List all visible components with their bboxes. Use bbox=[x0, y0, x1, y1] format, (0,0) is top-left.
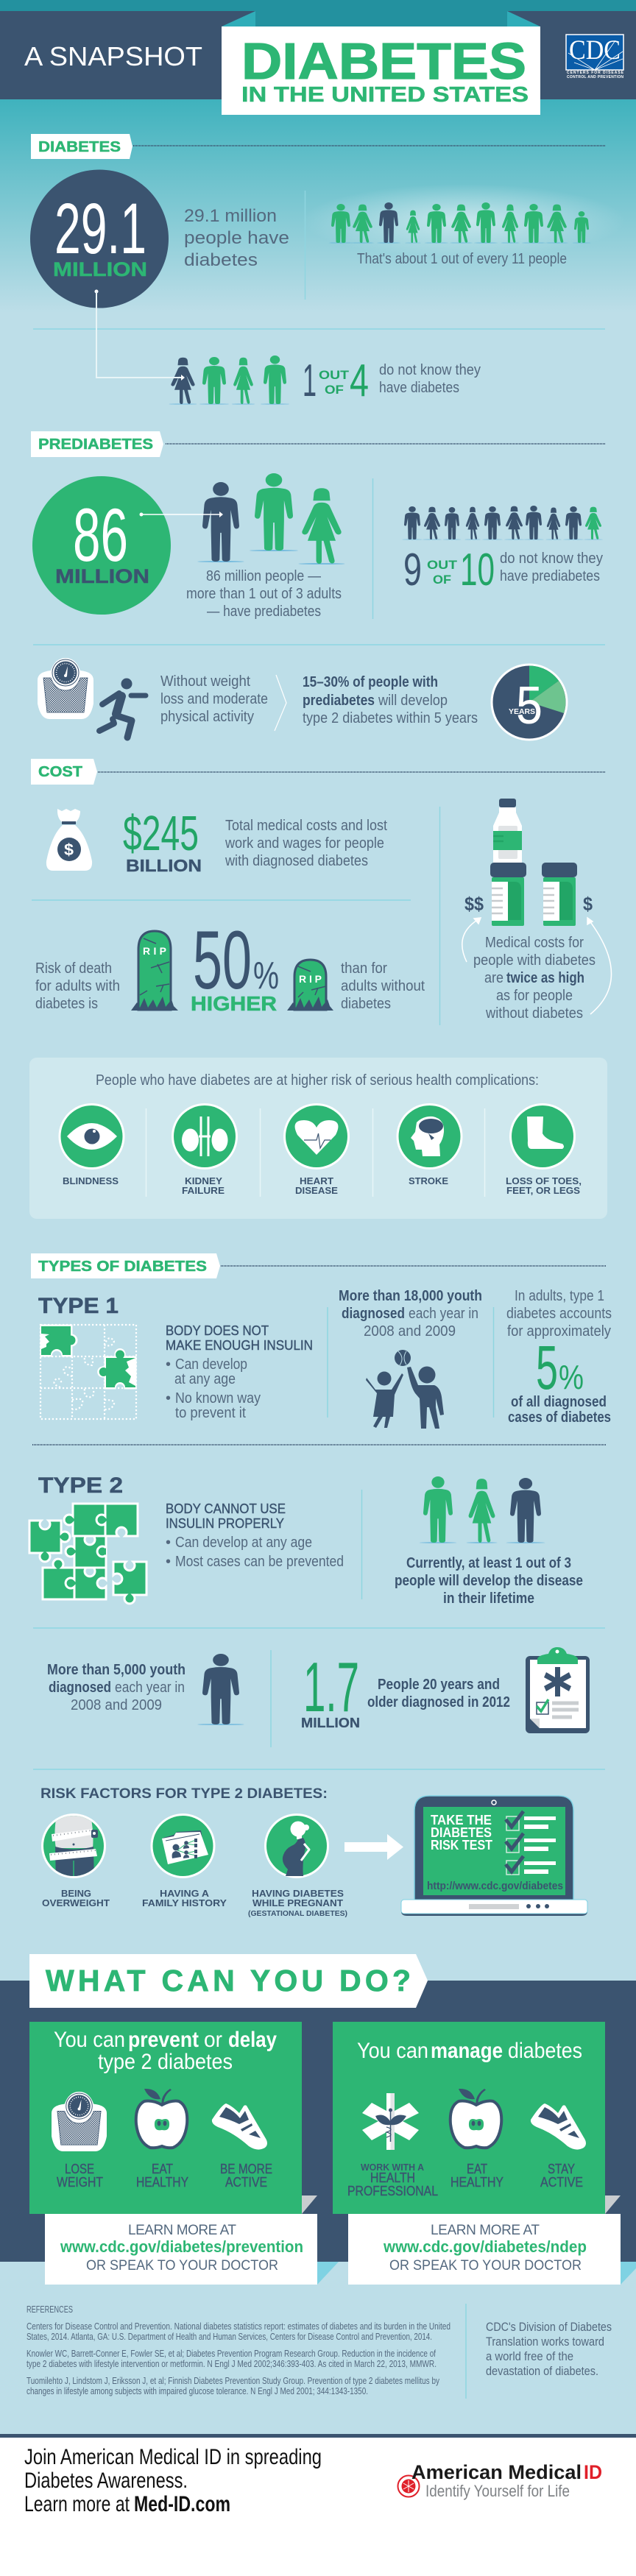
labels: prevent actions: EAT bbox=[152, 2162, 173, 2176]
text: risk of death bbox=[35, 960, 120, 1012]
text: than for adults without: than for bbox=[341, 960, 387, 977]
text: in adults 5 percent: cases of diabetes bbox=[508, 1409, 611, 1426]
text: CDC division statement: a world free of the bbox=[486, 2349, 573, 2363]
icon: type 2 puzzle bbox=[29, 1504, 146, 1604]
references: REFERENCES bbox=[26, 2304, 73, 2315]
panel heading: prevent or delay: prevent bbox=[128, 2028, 199, 2052]
section: risk factors bbox=[40, 1786, 587, 1918]
section: prediabetes bbox=[31, 431, 606, 740]
text: 29.1 million people have diabetes: diabetes bbox=[184, 250, 258, 270]
arrow: circle to person bbox=[140, 512, 223, 517]
stat circle: 86 million bbox=[32, 476, 171, 615]
text: 15-30 percent: prediabetes bbox=[303, 693, 375, 709]
stat: 9 out of 10: OUT bbox=[427, 558, 458, 572]
item: kidney failure bbox=[172, 1103, 238, 1196]
icon: star of life bbox=[362, 2093, 419, 2150]
labels: manage actions: HEALTHY bbox=[451, 2175, 504, 2190]
risk: overweight bbox=[41, 1811, 110, 1908]
stat: 9 out of 10: 9 bbox=[403, 545, 422, 595]
stat circle: 86 million: MILLION bbox=[55, 565, 149, 587]
text: 29.1 million people have diabetes: people have bbox=[184, 228, 289, 248]
panel heading: prevent or delay: type 2 diabetes bbox=[98, 2050, 233, 2074]
panel heading: manage diabetes: diabetes bbox=[508, 2039, 582, 2063]
icon: laptop risk test bbox=[401, 1796, 587, 1916]
item: kidney failure: KIDNEY bbox=[185, 1175, 222, 1186]
text: medical costs twice: are bbox=[484, 970, 504, 986]
caption: 1 out of every 11: That's about 1 out of every 11 people bbox=[357, 251, 567, 267]
risk: gestational diabetes: (GESTATIONAL DIABETES) bbox=[248, 1909, 347, 1918]
text: CDC division statement: CDC's Division of Diabetes bbox=[486, 2320, 612, 2334]
text: 5,000 youth: diagnosed bbox=[49, 1680, 111, 1696]
text: without weight loss bbox=[160, 673, 268, 725]
labels: prevent actions: WEIGHT bbox=[57, 2175, 103, 2190]
text: in adults 5 percent: diabetes accounts bbox=[506, 1306, 612, 1322]
banner: what can you do: WHAT CAN YOU DO? bbox=[46, 1964, 411, 1998]
icon: large tombstone: RIP bbox=[143, 945, 166, 957]
stat: 245 billion: BILLION bbox=[126, 856, 202, 875]
stat circle: 29.1 million: 29.1 bbox=[54, 188, 146, 269]
footer message: Learn more at bbox=[24, 2492, 130, 2516]
references: Centers for Disease Control and Prevention. National diabetes statistics report: estimates of diabetes and its burden in the United bbox=[26, 2321, 451, 2332]
item: stroke: STROKE bbox=[409, 1175, 448, 1186]
labels: manage actions: STAY bbox=[548, 2162, 575, 2176]
text: risk of death: diabetes is bbox=[35, 996, 98, 1012]
text: 18,000 youth: each year in bbox=[409, 1306, 478, 1322]
chart: 5 years pie bbox=[490, 664, 568, 740]
item: stroke bbox=[396, 1103, 462, 1186]
icon: youth figure bbox=[197, 1654, 244, 1725]
text: do not know: do not know they bbox=[379, 362, 481, 378]
panel heading: prevent or delay bbox=[54, 2028, 277, 2074]
text: medical costs twice: people with diabetes bbox=[473, 952, 596, 969]
text: type 1 description: • bbox=[166, 1390, 171, 1406]
text: type 1 description: No known way bbox=[175, 1390, 261, 1406]
section heading: prediabetes: PREDIABETES bbox=[38, 436, 153, 453]
icon: money bag bbox=[46, 809, 92, 871]
text: lifetime risk: Currently, at least 1 out of 3 bbox=[406, 1555, 571, 1571]
text: in adults 5 percent: of all diagnosed bbox=[511, 1394, 607, 1410]
text: 86 million people: 86 million people — bbox=[206, 568, 321, 584]
text: total medical costs: work and wages for people bbox=[225, 835, 384, 852]
text: type 2 description: • bbox=[166, 1535, 171, 1551]
text: type 2 description: Can develop at any age bbox=[175, 1535, 312, 1551]
header bbox=[0, 0, 636, 115]
labels: prevent actions: HEALTHY bbox=[136, 2175, 188, 2190]
risk: overweight: BEING bbox=[61, 1888, 91, 1899]
callout: ndep link bbox=[383, 2223, 587, 2274]
icon: money bag: $ bbox=[64, 841, 74, 859]
icon: laptop risk test: DIABETES bbox=[431, 1825, 492, 1840]
text: total medical costs bbox=[225, 818, 387, 869]
text: lifetime risk: people will develop the disease bbox=[395, 1573, 583, 1589]
references: Knowler WC, Barrett-Conner E, Fowler SE, et al; Diabetes Prevention Program Research Group. Reduction in the incidence of bbox=[26, 2349, 436, 2359]
callout: prevention link: OR SPEAK TO YOUR DOCTOR bbox=[86, 2258, 278, 2274]
section heading: diabetes bbox=[31, 134, 606, 159]
text: in adults 5 percent: 5 bbox=[536, 1333, 558, 1402]
text: people 20 years: older diagnosed in 2012 bbox=[367, 1694, 510, 1710]
section heading: types: TYPES OF DIABETES bbox=[38, 1259, 207, 1275]
text: medical costs twice: Medical costs for bbox=[485, 935, 584, 951]
text: than for adults without: adults without bbox=[341, 978, 425, 994]
text: 5,000 youth: each year in bbox=[115, 1680, 185, 1696]
stat: 1 out of 4: 4 bbox=[350, 355, 369, 406]
references: changes in lifestyle among subjects with impaired glucose tolerance. N Engl J Med 2001; 344:1343-1350. bbox=[26, 2386, 368, 2396]
text: 86 million people bbox=[186, 568, 342, 620]
labels: prevent actions: BE MORE bbox=[220, 2162, 272, 2176]
text: 86 million people: more than 1 out of 3 adults bbox=[186, 586, 342, 602]
text: type 1 description: MAKE ENOUGH INSULIN bbox=[166, 1338, 313, 1353]
CDC logo: CENTERS FOR DISEASE bbox=[567, 71, 624, 75]
stat circle: 29.1 million: MILLION bbox=[53, 258, 147, 280]
text: without weight loss: Without weight bbox=[160, 673, 250, 690]
title box: DIABETES bbox=[241, 32, 526, 90]
text: lifetime risk bbox=[395, 1555, 583, 1607]
text: 18,000 youth: 2008 and 2009 bbox=[364, 1323, 456, 1340]
section: cost bbox=[31, 759, 612, 1025]
stat: 50 percent higher: % bbox=[253, 955, 279, 997]
icon: apple bbox=[451, 2089, 501, 2148]
CDC logo bbox=[566, 35, 624, 79]
item: heart disease: DISEASE bbox=[295, 1185, 338, 1196]
icon: insulin bottle and pill bottles bbox=[490, 799, 577, 926]
heading: type 2: TYPE 2 bbox=[38, 1473, 123, 1498]
stat: 1 out of 4: 1 bbox=[303, 355, 317, 406]
text: 29.1 million people have diabetes bbox=[184, 206, 289, 270]
panel heading: manage diabetes bbox=[357, 2039, 582, 2063]
text: CDC division statement: Translation works toward bbox=[486, 2335, 604, 2349]
text: medical costs twice: twice as high bbox=[506, 970, 584, 986]
labels: prevent actions: ACTIVE bbox=[225, 2175, 267, 2190]
risk: family history bbox=[142, 1814, 227, 1908]
banner: what can you do bbox=[29, 1954, 428, 2008]
text: than for adults without bbox=[341, 960, 425, 1012]
item: loss of toes: LOSS OF TOES, bbox=[506, 1175, 582, 1186]
text: 5,000 youth: More than 5,000 youth bbox=[47, 1662, 186, 1678]
risk: family history: HAVING A bbox=[160, 1888, 210, 1899]
section heading: prediabetes bbox=[31, 431, 606, 457]
icon: scale bbox=[38, 658, 93, 719]
heading: risk factors: RISK FACTORS FOR TYPE 2 DIABETES: bbox=[40, 1786, 328, 1802]
section heading: cost bbox=[31, 759, 606, 785]
text: type 1 description: to prevent it bbox=[175, 1405, 246, 1421]
text: do not know: have diabetes bbox=[379, 380, 459, 396]
stat: 1.7 million: MILLION bbox=[301, 1716, 360, 1730]
text: people 20 years bbox=[367, 1677, 510, 1710]
stat: 9 out of 10 bbox=[403, 545, 495, 595]
labels: manage actions bbox=[347, 2162, 583, 2198]
labels: prevent actions: LOSE bbox=[65, 2162, 94, 2176]
item: heart disease: HEART bbox=[300, 1175, 333, 1186]
labels: manage actions: ACTIVE bbox=[540, 2175, 583, 2190]
text: CDC division statement bbox=[486, 2320, 612, 2378]
stat: 50 percent higher: 50 bbox=[193, 914, 252, 1006]
stat: 50 percent higher: HIGHER bbox=[191, 992, 277, 1015]
icon: small tombstone bbox=[287, 960, 333, 1011]
footer message: Diabetes Awareness. bbox=[24, 2469, 188, 2493]
arrow: to risk test bbox=[344, 1834, 403, 1860]
text: in adults 5 percent bbox=[506, 1288, 612, 1426]
text: type 1 description bbox=[166, 1323, 313, 1421]
references: type 2 diabetes with lifestyle intervention or metformin. N Engl J Med 2002;346:393-403. As cited in March 22, 2013, MMWR. bbox=[26, 2359, 437, 2369]
icon: large tombstone bbox=[131, 931, 178, 1011]
panel heading: prevent or delay: delay bbox=[228, 2028, 277, 2052]
item: kidney failure: FAILURE bbox=[182, 1185, 225, 1196]
item: loss of toes: FEET, OR LEGS bbox=[506, 1185, 580, 1196]
stat: 9 out of 10: OF bbox=[433, 573, 451, 587]
item: loss of toes bbox=[506, 1103, 582, 1196]
text: 15-30 percent: type 2 diabetes within 5 years bbox=[303, 710, 478, 726]
icon: laptop risk test: RISK TEST bbox=[431, 1838, 492, 1853]
labels: prevent actions bbox=[57, 2162, 272, 2190]
panel heading: manage diabetes: manage bbox=[431, 2039, 503, 2063]
panel heading: prevent or delay: or bbox=[204, 2028, 222, 2052]
item: heart disease bbox=[283, 1103, 350, 1196]
text: 18,000 youth: diagnosed bbox=[342, 1306, 405, 1322]
text: 5,000 youth bbox=[47, 1662, 186, 1713]
text: 15-30 percent: 15–30% of people with bbox=[303, 674, 438, 690]
text: do not know prediabetes: do not know they bbox=[500, 551, 603, 567]
labels: manage actions: PROFESSIONAL bbox=[347, 2184, 438, 2198]
stat: 1.7 million bbox=[301, 1648, 360, 1730]
text: risk of death: Risk of death bbox=[35, 960, 112, 977]
pictogram: 1 of 3 lifetime bbox=[420, 1476, 545, 1543]
icon: small tombstone: RIP bbox=[299, 973, 322, 985]
stat: 1.7 million: 1.7 bbox=[303, 1648, 359, 1727]
text: in adults 5 percent: % bbox=[559, 1358, 584, 1396]
text: 29.1 million people have diabetes: 29.1 million bbox=[184, 206, 277, 226]
text: without weight loss: loss and moderate bbox=[160, 691, 268, 707]
CDC logo: CONTROL AND PREVENTION bbox=[567, 75, 623, 79]
American Medical ID logo: ID bbox=[584, 2461, 602, 2483]
icon: type 1 puzzle bbox=[40, 1325, 136, 1419]
icon: shoe bbox=[212, 2103, 267, 2150]
title box: IN THE UNITED STATES bbox=[241, 83, 529, 107]
text: type 2 description: Most cases can be prevented bbox=[175, 1554, 344, 1570]
pictogram: 3 adults bbox=[197, 473, 344, 565]
footer message bbox=[24, 2445, 322, 2516]
section heading: types bbox=[31, 1253, 606, 1278]
stat circle: 29.1 million bbox=[30, 169, 169, 308]
text: 86 million people: — have prediabetes bbox=[207, 604, 321, 620]
text: type 2 description: BODY CANNOT USE bbox=[166, 1501, 286, 1516]
chart: 5 years pie: 5 bbox=[516, 676, 543, 735]
text: do not know bbox=[379, 362, 481, 396]
pictogram: 1 out of 4 bbox=[169, 355, 289, 405]
text: without weight loss: physical activity bbox=[160, 709, 254, 725]
stat: 1 out of 4: OUT bbox=[319, 368, 350, 382]
references: States, 2014. Atlanta, GA: U.S. Department of Health and Human Services, Centers for Disease Control and Prevention, 2014. bbox=[26, 2332, 432, 2342]
American Medical ID logo: American Medical bbox=[411, 2461, 582, 2483]
footer message: Med-ID.com bbox=[134, 2492, 230, 2516]
references: Tuomilehto J, Lindstom J, Eriksson J, et al; Finnish Diabetes Prevention Study Group. Prevention of type 2 diabetes mellitus by bbox=[26, 2376, 440, 2386]
footer bbox=[0, 2434, 636, 2576]
callout: ndep link: OR SPEAK TO YOUR DOCTOR bbox=[389, 2258, 582, 2274]
text: do not know prediabetes bbox=[500, 551, 603, 584]
risk: family history: FAMILY HISTORY bbox=[142, 1897, 227, 1908]
text: total medical costs: with diagnosed diabetes bbox=[225, 853, 368, 869]
references bbox=[26, 2304, 451, 2396]
callout: prevention link: www.cdc.gov/diabetes/prevention bbox=[60, 2237, 303, 2256]
labels: manage actions: EAT bbox=[467, 2162, 487, 2176]
text: medical costs twice: as for people bbox=[496, 988, 573, 1004]
icon: apple bbox=[136, 2089, 187, 2148]
text: type 1 description: Can develop bbox=[175, 1356, 247, 1373]
stat: 1 out of 4: OF bbox=[325, 383, 344, 397]
text: type 2 description: • bbox=[166, 1554, 171, 1570]
icon: laptop risk test: TAKE THE bbox=[431, 1813, 492, 1827]
icon: shoe bbox=[531, 2103, 586, 2150]
text: than for adults without: diabetes bbox=[341, 996, 391, 1012]
item: blindness bbox=[59, 1103, 125, 1186]
text: lifetime risk: in their lifetime bbox=[443, 1590, 534, 1607]
icon: clipboard bbox=[526, 1647, 590, 1733]
arrow: circle to person bbox=[94, 290, 185, 381]
callout: prevention link: LEARN MORE AT bbox=[128, 2223, 236, 2238]
snapshot tagline: A SNAPSHOT bbox=[24, 41, 202, 71]
section: types of diabetes bbox=[29, 1253, 612, 1769]
stat: 9 out of 10: 10 bbox=[460, 545, 495, 595]
arrows: curved bbox=[462, 918, 612, 1014]
icon: laptop risk test: http://www.cdc.gov/diabetes bbox=[427, 1880, 563, 1892]
American Medical ID logo bbox=[398, 2461, 602, 2500]
stat: 245 billion bbox=[123, 806, 202, 875]
text: type 1 description: • bbox=[166, 1356, 171, 1373]
American Medical ID logo: Identify Yourself for Life bbox=[425, 2482, 570, 2500]
text: 5,000 youth: 2008 and 2009 bbox=[71, 1697, 162, 1713]
text: risk of death: for adults with bbox=[35, 978, 120, 994]
text: 15-30 percent: will develop bbox=[378, 693, 448, 709]
icon: scale bbox=[52, 2092, 107, 2151]
section heading: cost: COST bbox=[38, 764, 82, 780]
callout: ndep link: LEARN MORE AT bbox=[431, 2223, 540, 2238]
heading: type 1: TYPE 1 bbox=[38, 1294, 119, 1318]
risk: gestational diabetes bbox=[248, 1814, 347, 1918]
footer message: Join American Medical ID in spreading bbox=[24, 2445, 322, 2469]
panel heading: manage diabetes: You can bbox=[357, 2039, 428, 2063]
chart: 5 years pie: YEARS bbox=[509, 708, 535, 716]
section: what can you do bbox=[0, 1954, 636, 2285]
icon: children with ball bbox=[366, 1350, 444, 1429]
text: medical costs twice bbox=[473, 935, 596, 1022]
pictogram: 1 out of 11 people bbox=[329, 202, 591, 243]
fold shadows bbox=[317, 2262, 636, 2285]
label: higher cost: $$ bbox=[464, 893, 484, 915]
panel heading: prevent or delay: You can bbox=[54, 2028, 125, 2052]
panel: prevent bbox=[29, 2022, 317, 2285]
text: type 2 description: INSULIN PROPERLY bbox=[166, 1516, 284, 1531]
text: type 1 description: BODY DOES NOT bbox=[166, 1323, 269, 1338]
section heading: diabetes: DIABETES bbox=[38, 139, 121, 155]
text: 18,000 youth: More than 18,000 youth bbox=[339, 1288, 482, 1304]
text: medical costs twice: without diabetes bbox=[485, 1005, 583, 1022]
text: total medical costs: Total medical costs and lost bbox=[225, 818, 387, 834]
title box bbox=[222, 26, 540, 115]
panel: manage bbox=[333, 2022, 621, 2285]
panel: health complications bbox=[29, 1058, 607, 1219]
icon: runner bbox=[99, 679, 146, 737]
section: diabetes bbox=[30, 134, 626, 406]
text: CDC division statement: devastation of diabetes. bbox=[486, 2364, 598, 2378]
pictogram: 9 out of 10 bbox=[402, 506, 603, 539]
text: in adults 5 percent: In adults, type 1 bbox=[515, 1288, 604, 1304]
risk: overweight: OVERWEIGHT bbox=[42, 1897, 110, 1908]
item: blindness: BLINDNESS bbox=[63, 1175, 119, 1186]
text: do not know prediabetes: have prediabetes bbox=[500, 568, 600, 584]
callout: ndep link: www.cdc.gov/diabetes/ndep bbox=[383, 2237, 587, 2256]
panel heading: People who have diabetes are at higher risk of serious health complications: bbox=[96, 1072, 539, 1089]
text: type 1 description: at any age bbox=[174, 1371, 236, 1387]
stat circle: 86 million: 86 bbox=[73, 493, 128, 577]
stat: 245 billion: $245 bbox=[123, 806, 199, 861]
stat: 1 out of 4 bbox=[303, 355, 369, 406]
label: lower cost: $ bbox=[583, 893, 593, 915]
text: type 2 description bbox=[166, 1501, 344, 1570]
text: 15-30 percent bbox=[303, 674, 478, 726]
CDC logo: CDC bbox=[569, 35, 621, 66]
callout: prevention link bbox=[60, 2223, 303, 2274]
text: in adults 5 percent: for approximately bbox=[507, 1323, 611, 1340]
labels: manage actions: HEALTH bbox=[370, 2170, 415, 2185]
labels: manage actions: WORK WITH A bbox=[361, 2162, 425, 2173]
risk: gestational diabetes: HAVING DIABETES bbox=[252, 1888, 344, 1899]
text: people 20 years: People 20 years and bbox=[378, 1677, 500, 1693]
text: 18,000 youth bbox=[339, 1288, 482, 1340]
risk: gestational diabetes: WHILE PREGNANT bbox=[252, 1897, 343, 1908]
